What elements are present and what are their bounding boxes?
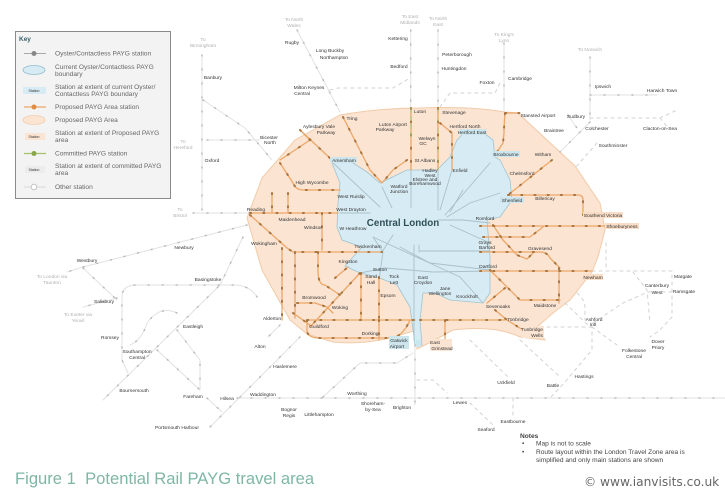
station labels: [37, 14, 695, 433]
station labels: Romford: [476, 216, 495, 222]
station labels: Westbury: [77, 258, 98, 264]
key: committed station: [24, 150, 128, 158]
station labels: Woking: [332, 305, 348, 311]
station labels: Eastbourne: [500, 419, 526, 425]
key: station at proposed extent: Station at extent of Proposed PAYG: [55, 130, 159, 137]
station labels: Lynn: [499, 38, 509, 44]
station labels: Battle: [547, 383, 560, 389]
station labels: Folkestone: [622, 348, 646, 354]
station labels: Amersham: [332, 158, 356, 164]
station labels: Hertford East: [458, 130, 487, 136]
station labels: Newbury: [174, 245, 194, 251]
station labels: Bedford: [390, 64, 408, 70]
station labels: Enfield: [453, 168, 468, 174]
station labels: Bognor: [281, 407, 297, 413]
station labels: Bristol: [173, 213, 187, 219]
station labels: East: [430, 340, 441, 346]
station labels: Central: [626, 354, 642, 360]
station labels: Newham: [583, 275, 603, 281]
station labels: Lewes: [453, 400, 468, 406]
station labels: Southampton: [122, 349, 152, 355]
station labels: Tonbridge: [507, 317, 529, 323]
station labels: Romsey: [101, 335, 120, 341]
station labels: by-Sea: [365, 407, 381, 413]
station labels: Dartford: [479, 264, 497, 270]
station labels: Taunton: [43, 280, 61, 286]
station labels: West Drayton: [336, 207, 366, 213]
station labels: Hall: [367, 280, 375, 286]
station labels: To Norwich: [578, 47, 602, 53]
station labels: Tunbridge: [521, 327, 543, 333]
notes: Notes: [520, 433, 539, 440]
station labels: Shoreham-: [361, 401, 385, 407]
station labels: Peterborough: [442, 52, 472, 58]
station labels: Oxford: [205, 158, 220, 164]
notes: •: [522, 440, 525, 448]
station labels: Dover: [651, 339, 665, 345]
station labels: Barford: [479, 245, 495, 251]
station labels: Parkway: [317, 130, 336, 136]
key: station at committed extent: Station: [29, 168, 39, 172]
station labels: Huntingdon: [441, 66, 467, 72]
key: station at current extent: Station at extent of current Oyster/: [55, 84, 156, 91]
station labels: Luton: [414, 109, 426, 115]
key: station at committed extent: [25, 163, 161, 177]
station labels: Ashford: [586, 317, 603, 323]
station labels: Banbury: [204, 75, 223, 81]
station label backgrounds: [330, 129, 639, 351]
station labels: Dorking: [362, 331, 379, 337]
key: station at committed extent: area: [55, 170, 69, 177]
station labels: Croydon: [414, 280, 433, 286]
station labels: To Exeter via: [64, 312, 92, 318]
key panel: Key: [19, 36, 31, 43]
station labels: Grinstead: [431, 346, 453, 352]
station labels: Tock: [389, 274, 400, 280]
station labels: Shenfield: [502, 198, 522, 204]
station labels: Maidenhead: [279, 217, 306, 223]
station labels: Wells: [531, 333, 543, 339]
station labels: Junction: [390, 189, 408, 195]
station labels: Elstree and: [413, 177, 438, 183]
station labels: Intl: [590, 322, 596, 328]
key: committed station: Committed PAYG station: [55, 150, 128, 158]
station labels: To: [180, 139, 186, 145]
key: current boundary: Current Oyster/Contactless PAYG: [55, 64, 154, 71]
station labels: Southend Victoria: [584, 213, 623, 219]
station labels: East: [433, 22, 444, 28]
station labels: Waddington: [250, 392, 276, 398]
station labels: Priory: [652, 345, 665, 351]
station labels: Foxton: [480, 80, 495, 86]
notes: simplified and only main stations are shown: [536, 457, 664, 464]
station labels: Sudbury: [567, 114, 586, 120]
station labels: Lett: [390, 280, 399, 286]
key: proposed area: Proposed PAYG Area: [55, 117, 118, 124]
station labels: Clacton-on-Sea: [643, 126, 677, 132]
station labels: Colchester: [585, 126, 609, 132]
station labels: Stevenage: [442, 110, 466, 116]
station labels: Wales: [287, 23, 301, 29]
station labels: Braintree: [544, 128, 564, 134]
current Oyster/Contactless PAYG boundary: [330, 130, 512, 345]
station labels: Sutton: [373, 267, 387, 273]
key: station at current extent: Station: [29, 89, 39, 93]
station labels: Reading: [247, 207, 265, 213]
station labels: Borehamwood: [409, 181, 441, 187]
key: proposed area: [23, 116, 118, 124]
station labels: Ramsgate: [673, 289, 695, 295]
station labels: Twickenham: [354, 244, 382, 250]
key: oyster station: Oyster/Contactless PAYG station: [55, 50, 151, 58]
station labels: Bournemouth: [119, 388, 149, 394]
station labels: Welwyn: [418, 136, 436, 142]
watermark: © www.ianvisits.co.uk: [584, 475, 720, 489]
station labels: Bicester: [260, 135, 278, 141]
station labels: Seaford: [477, 427, 495, 433]
station labels: Luton Airport: [379, 122, 408, 128]
station labels: Bromwood: [302, 295, 326, 301]
station labels: Broxbourne: [493, 152, 519, 158]
station labels: Jane: [440, 286, 451, 292]
station labels: Haslemere: [273, 364, 297, 370]
station labels: West: [651, 290, 663, 296]
station labels: Billericay: [535, 196, 555, 202]
key: station at proposed extent: Station: [29, 135, 39, 139]
station labels: Grays: [478, 240, 492, 246]
station labels: Airport: [390, 344, 405, 350]
station labels: Midlands: [400, 20, 420, 26]
station labels: Hilsea: [220, 396, 234, 402]
station labels: Wellington: [429, 291, 452, 297]
key: station at current extent: [23, 84, 156, 98]
station labels: Windsor: [304, 225, 322, 231]
station labels: Witham: [535, 152, 551, 158]
station labels: Basingstoke: [195, 277, 222, 283]
station labels: Southminster: [599, 143, 628, 149]
key panel: [16, 32, 170, 198]
station labels: To East: [402, 14, 419, 20]
station labels: Gatwick: [390, 338, 408, 344]
station labels: Alton: [254, 344, 266, 350]
station labels: Shoeburyness: [606, 224, 638, 230]
key: other station: [24, 184, 93, 191]
station labels: Northampton: [320, 55, 348, 61]
key: proposed station: Proposed PAYG Area station: [55, 104, 139, 111]
notes: [520, 433, 686, 464]
station labels: Rugby: [285, 40, 300, 46]
station labels: Canterbury: [645, 283, 670, 289]
station labels: To: [200, 37, 206, 43]
key: station at committed extent: Station at extent of committed PAYG: [55, 163, 161, 170]
station labels: To London via: [37, 274, 67, 280]
station labels: Brighton: [393, 405, 411, 411]
station labels: Portsmouth Harbour: [155, 425, 199, 431]
station labels: Hastings: [574, 374, 594, 380]
station labels: Wokingham: [251, 241, 277, 247]
station labels: North: [264, 140, 276, 146]
station labels: Littlehampton: [304, 412, 334, 418]
station labels: Uckfield: [497, 380, 515, 386]
key: other station: Other station: [55, 184, 93, 191]
proposed PAYG area: [247, 108, 605, 349]
station labels: Yeovil: [72, 318, 84, 324]
station labels: West Ruislip: [337, 194, 365, 200]
figure title: Figure 1 Potential Rail PAYG travel area: [15, 469, 315, 488]
station labels: Central: [129, 355, 145, 361]
key: current boundary: [23, 64, 154, 78]
station labels: To King's: [494, 32, 514, 38]
station labels: To North: [285, 17, 304, 23]
notes: •: [522, 449, 525, 456]
station labels: Salisbury: [94, 299, 115, 305]
station labels: To: [177, 207, 183, 213]
station labels: Epsom: [380, 293, 396, 299]
station labels: Guildford: [309, 324, 329, 330]
station labels: West: [424, 173, 436, 179]
station labels: Eastleigh: [183, 324, 203, 330]
station labels: Hereford: [173, 145, 193, 151]
central london label: Central London: [367, 218, 439, 229]
station labels: Milton Keynes: [294, 85, 325, 91]
station labels: Gravesend: [528, 246, 552, 252]
notes: Route layout within the London Travel Zone area is: [536, 449, 686, 456]
station labels: High Wycombe: [295, 180, 329, 186]
station labels: Fareham: [183, 394, 203, 400]
station labels: Margate: [674, 274, 692, 280]
station labels: W Heathrow: [340, 226, 367, 232]
station labels: Regis: [283, 413, 296, 419]
station labels: Aylesbury Vale: [303, 124, 335, 130]
station labels: Tring: [347, 116, 358, 122]
station labels: Maidstone: [534, 303, 557, 309]
station labels: East: [418, 275, 429, 281]
station labels: Cambridge: [508, 76, 532, 82]
station labels: Watford: [391, 184, 408, 190]
station labels: Parkway: [376, 127, 395, 133]
station labels: Hadley: [422, 168, 438, 174]
station labels: Kingston: [338, 259, 358, 265]
notes: Map is not to scale: [536, 440, 591, 448]
station labels: St Albans: [415, 158, 436, 164]
station labels: Stansted Airport: [521, 113, 556, 119]
key: station at current extent: Contactless PAYG boundary: [55, 91, 139, 98]
station labels: Central: [294, 91, 310, 97]
rail lines: [67, 30, 725, 427]
station labels: GC: [419, 141, 427, 147]
key: station at proposed extent: [25, 130, 159, 144]
station labels: Knockholt: [456, 294, 478, 300]
station labels: Birmingham: [190, 43, 216, 49]
key: current boundary: boundary: [55, 71, 83, 78]
station labels: Kettering: [388, 36, 408, 42]
station labels: Sand: [365, 274, 377, 280]
station labels: Ipswich: [595, 84, 611, 90]
station labels: Hertford North: [450, 124, 481, 130]
station labels: To North: [429, 16, 448, 22]
station labels: Chelmsford: [509, 171, 535, 177]
key: station at proposed extent: area: [55, 137, 69, 144]
station labels: Alderton: [263, 316, 281, 322]
station labels: Harwich Town: [647, 88, 677, 94]
station labels: Long Buckby: [316, 48, 345, 54]
station labels: Worthing: [347, 391, 367, 397]
station labels: Sevenoaks: [486, 304, 511, 310]
